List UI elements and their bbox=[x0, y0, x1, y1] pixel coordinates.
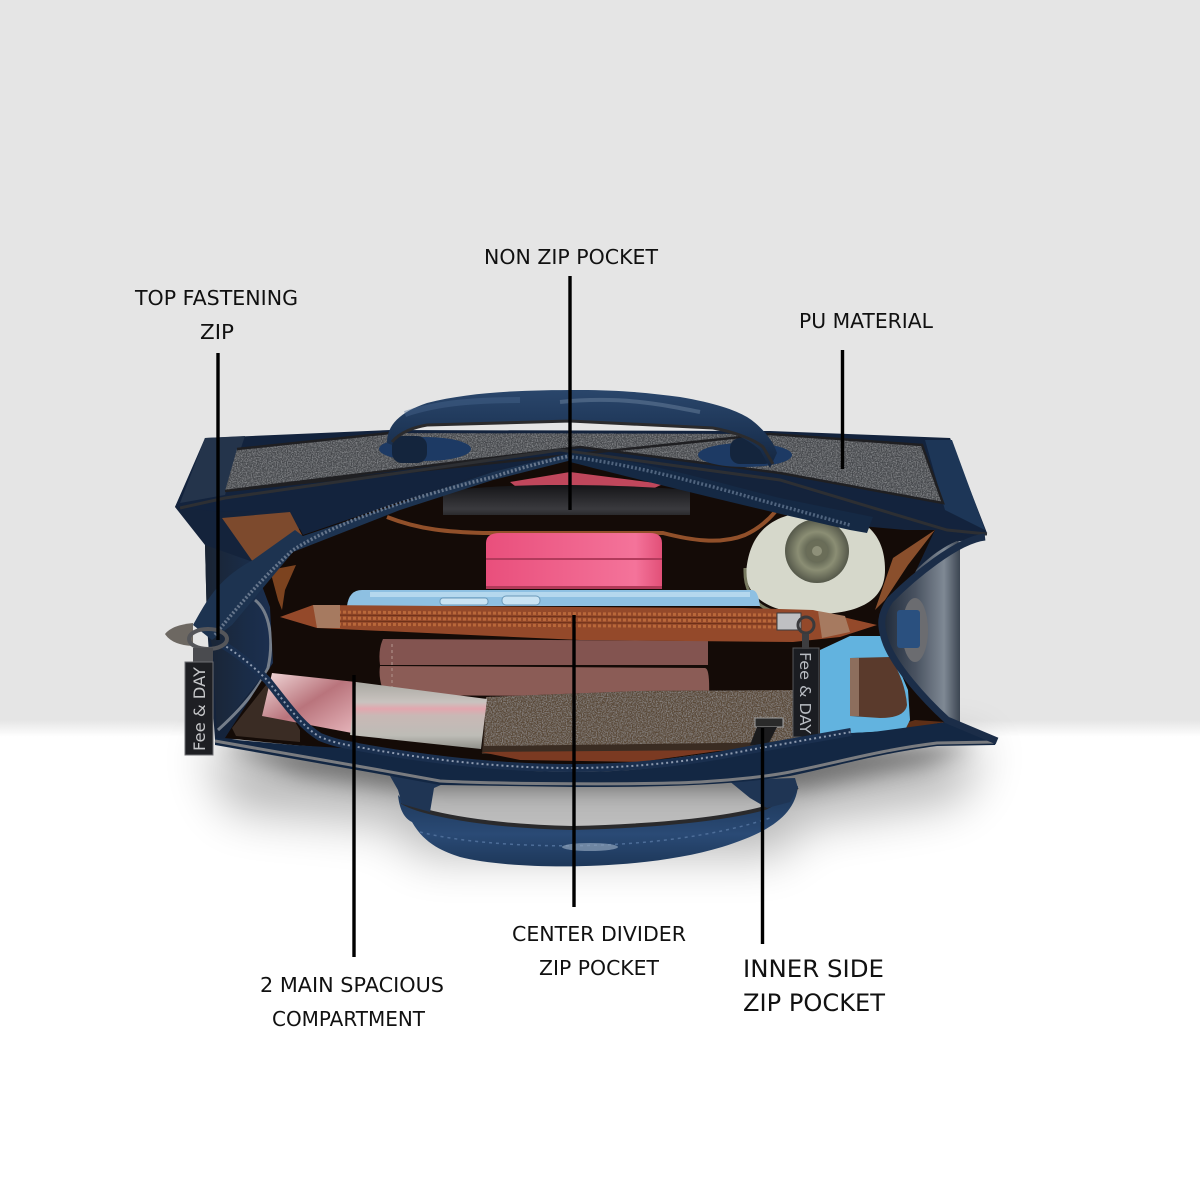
line: top fastening zip bbox=[216, 353, 220, 640]
side gusset right bbox=[880, 541, 960, 726]
blue bottle bbox=[820, 636, 910, 735]
centre divider zip pocket bbox=[280, 605, 877, 642]
lipstick tube bbox=[262, 673, 487, 749]
tan lining right bbox=[875, 530, 935, 610]
line: non zip pocket bbox=[568, 276, 572, 510]
open zip tape upper left bbox=[193, 453, 572, 640]
line: main compartment bbox=[352, 675, 356, 957]
brown book bbox=[481, 690, 800, 762]
label: inner side zip pocket: ZIP POCKET bbox=[743, 989, 885, 1017]
interior bbox=[225, 455, 947, 772]
bag back fill silhouette bbox=[175, 438, 987, 740]
left zip slider and metal tag bbox=[165, 623, 227, 755]
front rim bbox=[215, 722, 997, 787]
open zip tape upper right bbox=[570, 453, 873, 533]
label: center divider zip pocket: CENTER DIVIDER bbox=[512, 922, 686, 946]
line: inner side zip bbox=[761, 728, 764, 944]
smartphone bbox=[347, 590, 760, 606]
right edge rim bbox=[882, 537, 997, 741]
open zip lower bbox=[222, 644, 851, 768]
label: center divider zip pocket bbox=[512, 922, 686, 980]
side gusset left bbox=[205, 545, 273, 733]
white cream container bbox=[745, 512, 885, 614]
lining lower left bbox=[232, 680, 300, 742]
non zip pocket contents bbox=[387, 472, 775, 541]
label: top fastening zip: ZIP bbox=[200, 320, 234, 344]
floor shadow under bag bbox=[205, 745, 985, 855]
label: center divider zip pocket: ZIP POCKET bbox=[539, 956, 660, 980]
label: inner side zip pocket bbox=[743, 955, 885, 1017]
lining lower right bbox=[870, 720, 945, 735]
bottom handle bbox=[390, 776, 798, 866]
tan lining left bbox=[222, 512, 302, 562]
line: pu material bbox=[841, 350, 844, 469]
pink tape roll bbox=[486, 533, 662, 589]
brown wallets bbox=[379, 639, 709, 697]
right zip pull with tag bbox=[777, 613, 819, 737]
label: 2 main spacious compartment bbox=[260, 973, 444, 1031]
top handle bbox=[379, 390, 792, 468]
tan lining inner left bbox=[270, 565, 296, 610]
label: inner side zip pocket: INNER SIDE bbox=[743, 955, 884, 983]
front rim edge highlight bbox=[215, 741, 995, 784]
line: centre divider bbox=[572, 615, 576, 907]
bag illustration bbox=[165, 390, 997, 866]
right zip pull with tag: Fee & DAY bbox=[796, 652, 814, 735]
label: 2 main spacious compartment: COMPARTMENT bbox=[272, 1007, 426, 1031]
left zip slider and metal tag: Fee & DAY bbox=[190, 667, 209, 751]
side ring right bbox=[897, 598, 928, 662]
leader lines bbox=[218, 276, 842, 957]
label: 2 main spacious compartment: 2 MAIN SPACIOUS bbox=[260, 973, 444, 997]
label: top fastening zip bbox=[134, 286, 298, 344]
label: pu material: PU MATERIAL bbox=[799, 309, 934, 333]
label: top fastening zip: TOP FASTENING bbox=[134, 286, 298, 310]
side gusset left rim edge bbox=[218, 600, 271, 730]
back panel with pu material bbox=[175, 430, 987, 540]
label: non zip pocket: NON ZIP POCKET bbox=[484, 245, 659, 269]
